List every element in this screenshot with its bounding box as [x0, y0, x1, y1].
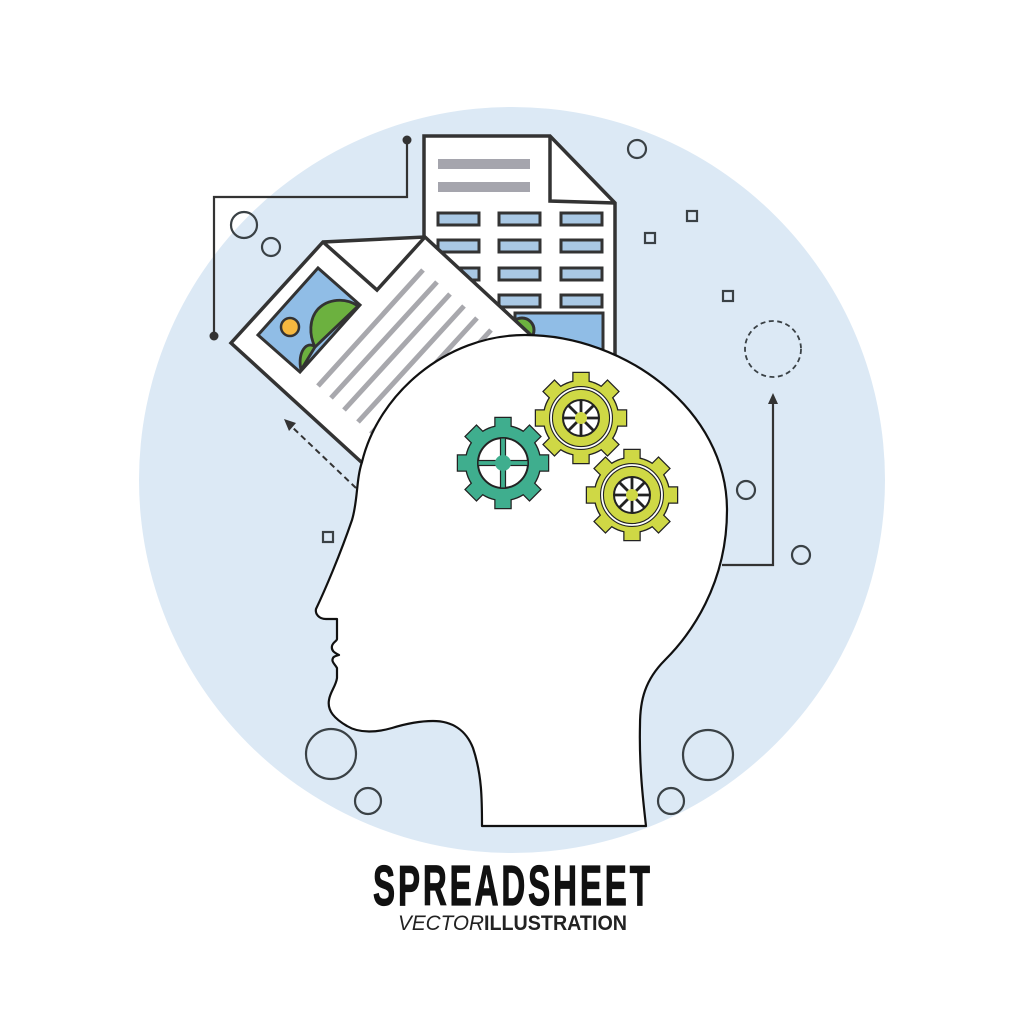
yellow gear bottom — [587, 450, 677, 540]
teal gear — [458, 418, 548, 508]
text lines — [318, 270, 491, 446]
subtitle: ILLUSTRATION — [484, 912, 627, 935]
page with picture document — [231, 237, 560, 470]
decorative bubbles and squares — [231, 140, 810, 814]
spreadsheet document — [424, 136, 615, 380]
yellow gear top — [536, 373, 626, 463]
up arrow connector — [722, 393, 778, 565]
background circle — [139, 107, 885, 853]
dashed arrow — [284, 419, 356, 488]
title: SPREADSHEET — [373, 854, 653, 917]
connector line with end dots — [210, 136, 412, 340]
head silhouette — [316, 335, 727, 826]
picture thumbnail — [258, 268, 360, 372]
subtitle: VECTOR — [398, 912, 484, 935]
